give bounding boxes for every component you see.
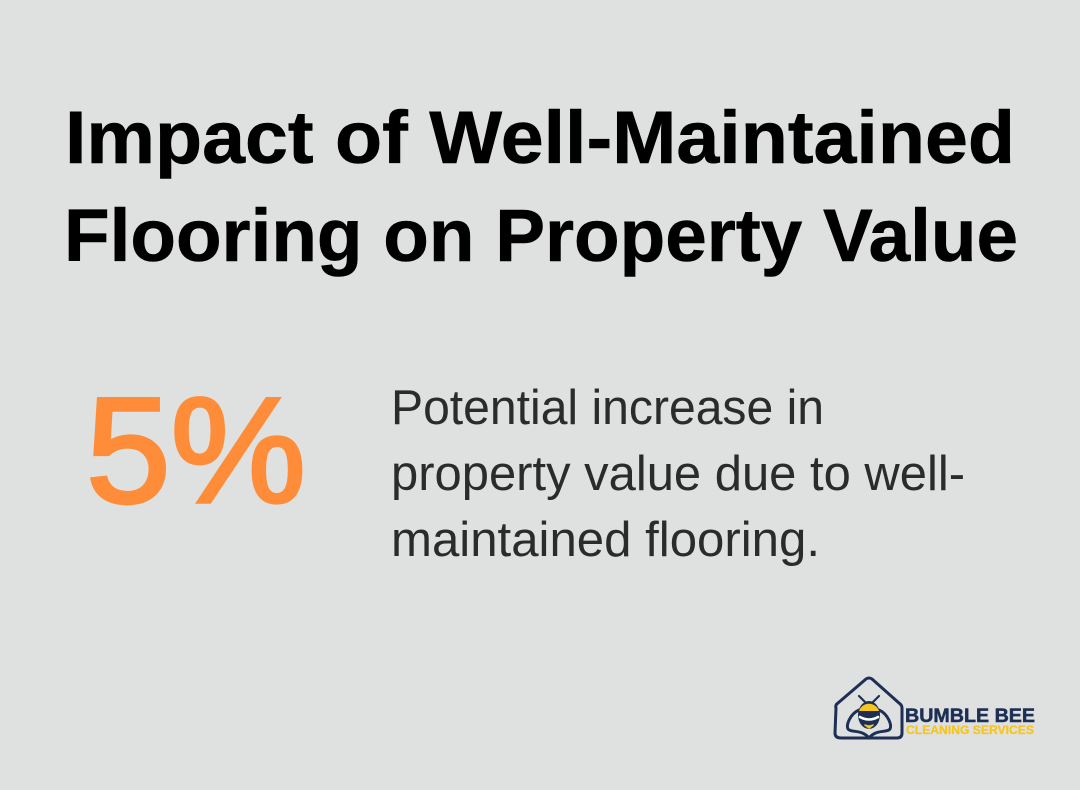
statistic: 5%: 5% — [86, 366, 306, 534]
description text — [391, 381, 965, 567]
description text: maintained flooring. — [391, 513, 820, 567]
icon: house with bee — [835, 678, 902, 738]
logo: Bumble Bee Cleaning Services — [835, 678, 1035, 738]
description text: property value due to well- — [391, 447, 965, 501]
title — [64, 96, 1018, 277]
logo tagline: CLEANING SERVICES — [906, 723, 1034, 737]
title: Impact of Well-Maintained — [65, 96, 1015, 179]
logo name: BUMBLE BEE — [905, 705, 1035, 727]
description text: Potential increase in — [391, 381, 824, 435]
title: Flooring on Property Value — [64, 194, 1018, 277]
